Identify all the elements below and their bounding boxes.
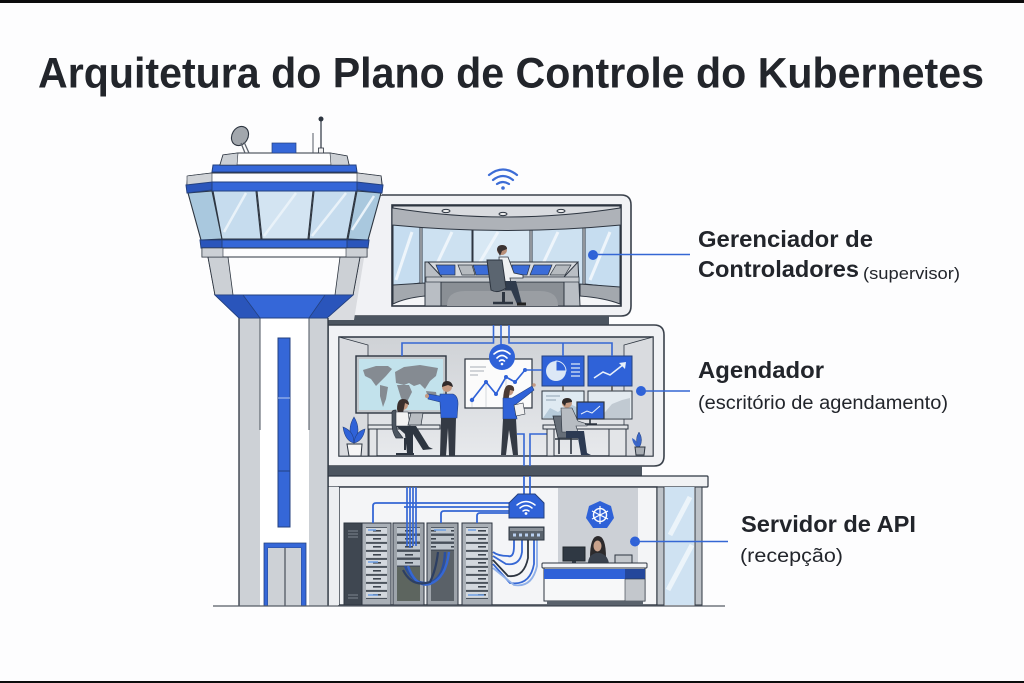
dashboard screens — [542, 356, 632, 419]
icon: large plant — [343, 417, 365, 456]
tower shaft — [239, 318, 328, 606]
glass entrance — [657, 487, 702, 605]
desks — [368, 425, 628, 456]
label: API server — [740, 511, 916, 567]
label: API server: (recepção) — [740, 546, 843, 567]
panel: scheduler floor — [328, 325, 664, 476]
person: man at map — [425, 381, 458, 456]
panel: API server floor — [328, 476, 708, 606]
callout: API server connector — [630, 536, 728, 546]
title: Arquitetura do Plano de Controle do Kubernetes — [38, 50, 984, 98]
label: controller manager — [698, 226, 960, 283]
server racks — [344, 523, 492, 605]
person: receptionist — [588, 536, 609, 564]
panel: control tower — [186, 116, 383, 606]
icon: wifi above building — [489, 170, 517, 190]
control room windows — [392, 205, 621, 306]
label: controller manager: Controladores — [698, 256, 859, 282]
icon: wifi hub — [489, 344, 515, 370]
person: seated man at monitor — [553, 398, 604, 455]
person: seated woman with laptop — [392, 399, 433, 454]
world map screen — [356, 356, 446, 413]
network lines — [402, 325, 612, 466]
ground line — [213, 605, 725, 607]
panel: controller manager floor — [328, 195, 631, 325]
tower upper bands — [186, 153, 383, 193]
tower lower bands — [200, 240, 369, 257]
curved ceiling — [392, 205, 621, 230]
control console — [425, 262, 580, 306]
label: scheduler: Agendador — [698, 357, 824, 383]
icon: small plant — [632, 432, 645, 455]
icon: satellite dish — [228, 123, 252, 153]
tower neck and funnel — [208, 257, 360, 318]
label: controller manager: (supervisor) — [863, 264, 960, 283]
label: controller manager: Gerenciador de — [698, 226, 873, 252]
callout: scheduler connector — [636, 386, 690, 396]
reception monitor — [563, 547, 585, 566]
callout: controller manager connector — [588, 250, 690, 260]
reception device — [615, 555, 632, 563]
label: API server: Servidor de API — [741, 511, 916, 537]
tower shadow on wall — [328, 184, 382, 320]
tower cab windows — [188, 191, 381, 240]
network switch — [509, 527, 544, 540]
label: scheduler: (escritório de agendamento) — [698, 393, 948, 414]
network cabling — [373, 476, 537, 585]
tower door — [264, 543, 306, 606]
icon: wifi router — [509, 494, 544, 518]
person: woman at chart — [501, 383, 536, 455]
rooftop equipment — [272, 116, 324, 153]
operator at console — [487, 245, 526, 304]
blue slot window — [278, 338, 290, 527]
analytics chart board — [465, 359, 532, 408]
icon: kubernetes badge — [586, 501, 614, 528]
reception desk — [542, 563, 647, 605]
label: scheduler — [698, 357, 948, 414]
